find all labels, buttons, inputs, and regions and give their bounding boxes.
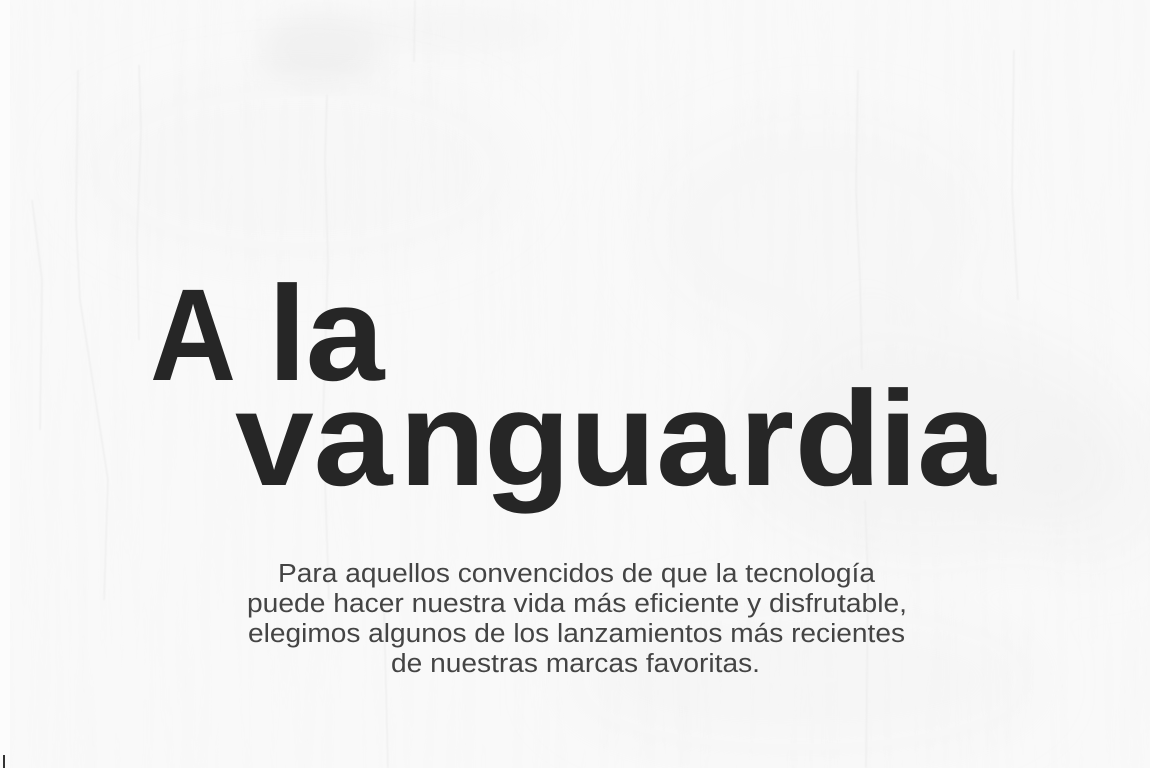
title word: la: la: [268, 259, 385, 409]
title word: vanguardia: vanguardia: [235, 364, 997, 514]
intro paragraph: [247, 560, 907, 678]
paragraph line 3: elegimos algunos de los lanzamientos más recientes: [248, 620, 905, 648]
paragraph line 2: puede hacer nuestra vida más eficiente y disfrutable,: [247, 590, 907, 618]
title word: A: A: [150, 262, 236, 408]
paragraph line 4: de nuestras marcas favoritas.: [391, 650, 760, 678]
title: A la vanguardia: [150, 259, 997, 514]
paragraph line 1: Para aquellos convencidos de que la tecnología: [278, 560, 876, 588]
corner tick mark: [3, 755, 5, 768]
